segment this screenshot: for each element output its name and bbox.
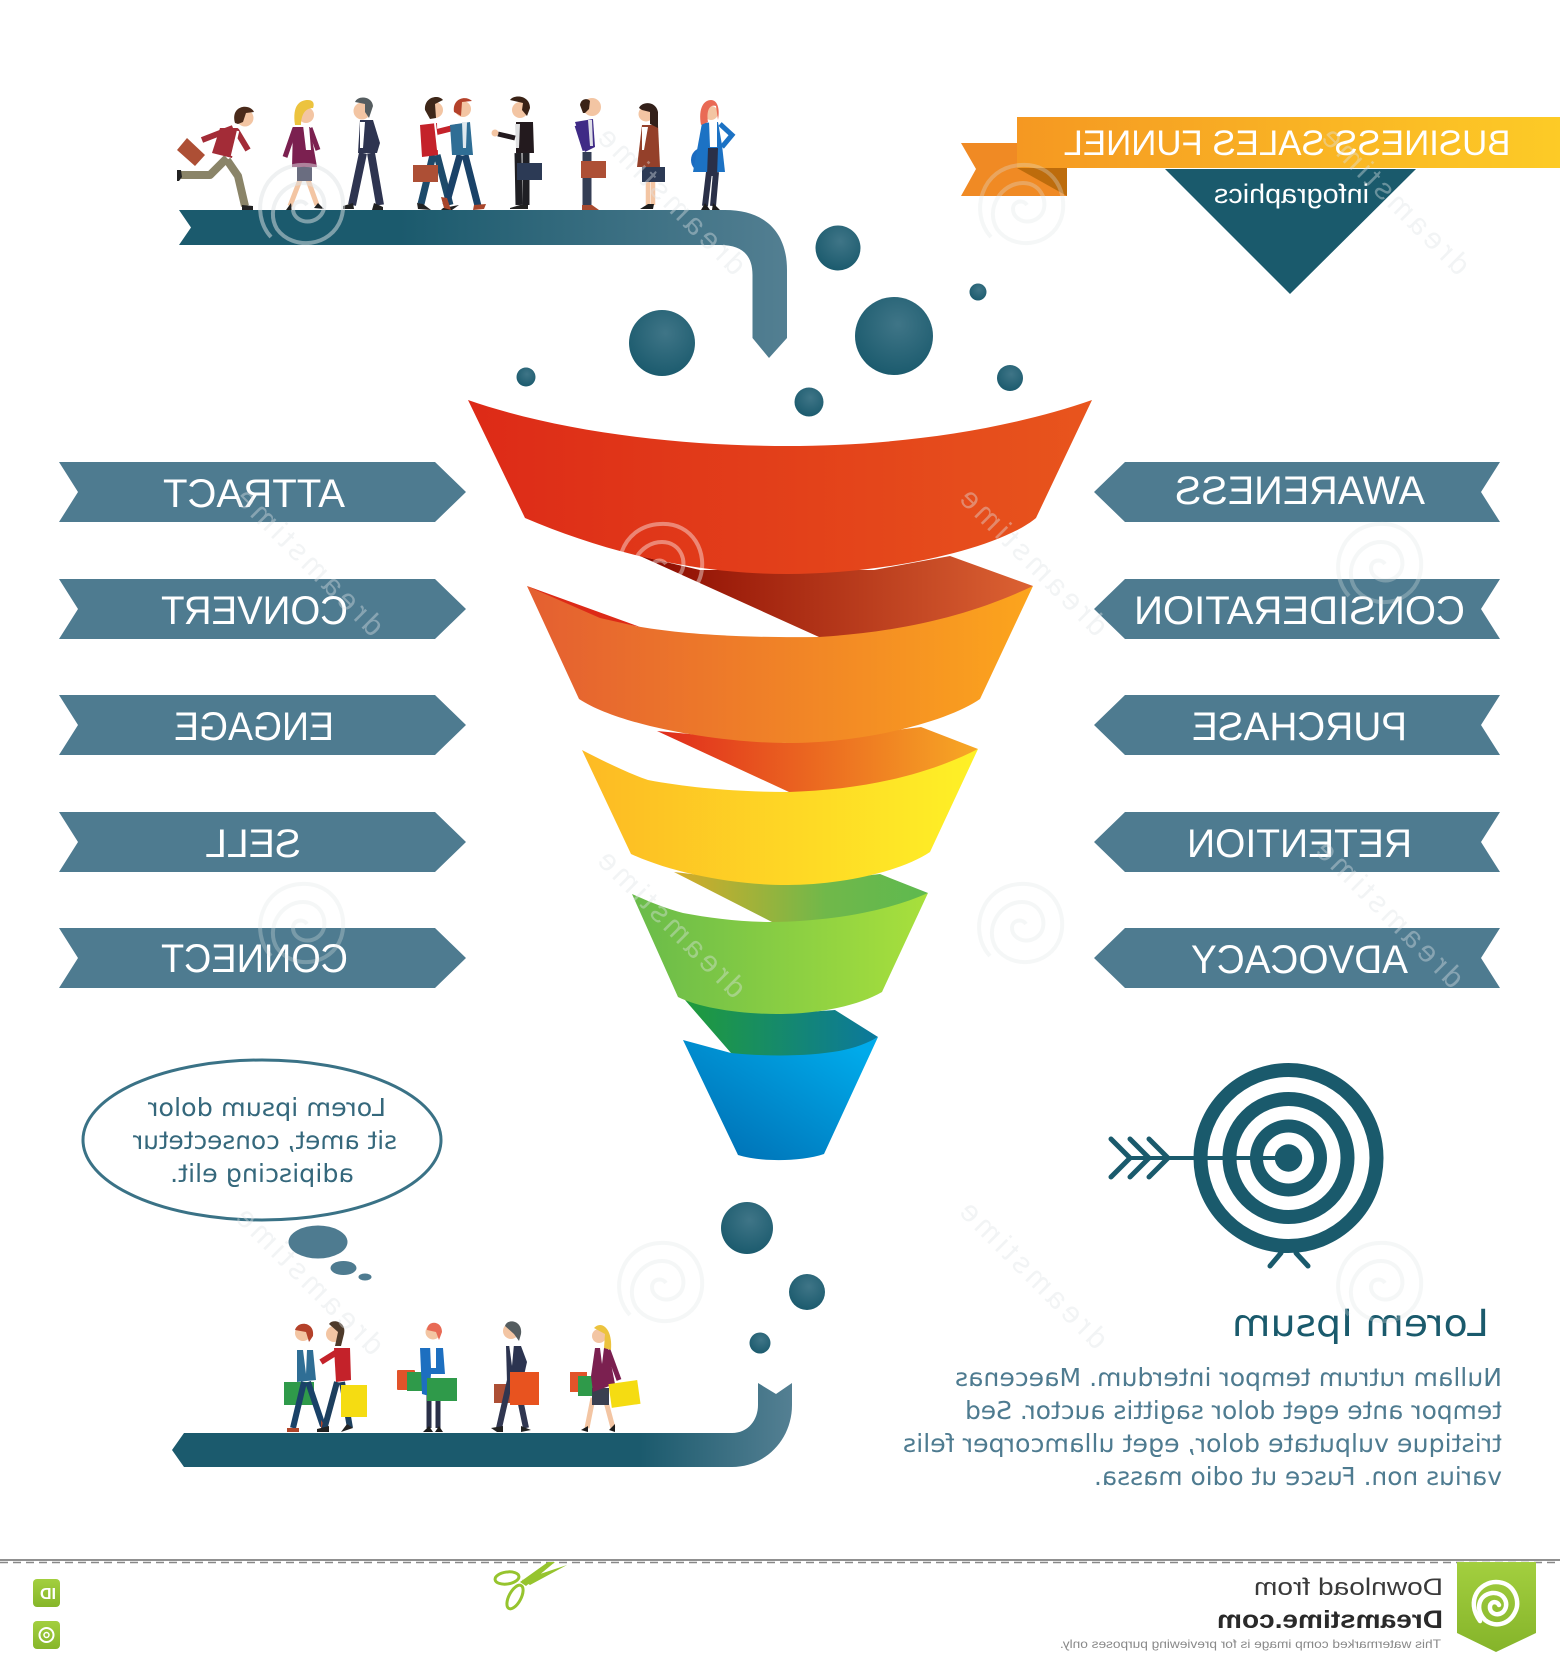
- copyright tag: [33, 1621, 60, 1649]
- person: woman in brown coat with briefcase: [637, 103, 665, 209]
- bubble text: adipiscing elit.: [170, 1159, 354, 1188]
- watermark text: dreamstime: [229, 482, 390, 643]
- bubble text: [132, 1093, 397, 1188]
- ID tag: ID: [40, 1586, 56, 1603]
- footer: [0, 1560, 1560, 1652]
- label: CONVERT: CONVERT: [161, 589, 348, 633]
- watermark text: dreamstime: [953, 1195, 1114, 1356]
- person: bald man in purple jacket with briefcase: [575, 98, 606, 210]
- top conveyor arrow: [179, 210, 787, 358]
- funnel inner band 1: [640, 556, 1033, 650]
- funnel segment 5: blue: [683, 1037, 878, 1160]
- customer: blonde woman with bags: [570, 1325, 641, 1432]
- target middle ring: [1230, 1099, 1348, 1217]
- ID tag: [33, 1579, 60, 1607]
- body paragraph: Nullam rutrum tempor interdum. Maecenas: [955, 1363, 1502, 1392]
- body paragraph: tempor ante eget dolor sagittis auctor. Sed: [965, 1396, 1502, 1425]
- subtitle text: infographics: [1214, 179, 1369, 209]
- watermark text: dreamstime: [229, 1201, 390, 1362]
- label: RETENTION: RETENTION: [1187, 822, 1412, 866]
- label: CONNECT: CONNECT: [161, 937, 348, 981]
- ribbon title text: BUSINESS SALES FUNNEL: [1064, 124, 1510, 163]
- people queue walking on top conveyor: [177, 96, 732, 210]
- funnel inner band 4: [685, 1000, 878, 1062]
- person: man in blue jacket: [441, 98, 486, 210]
- label: ADVOCACY: [1094, 928, 1500, 988]
- ribbon tail: [961, 143, 1067, 196]
- person: running man with briefcase: [177, 107, 254, 210]
- heading: Lorem Ipsum: Lorem Ipsum: [1232, 1302, 1489, 1345]
- funnel inner band 2: [657, 727, 978, 802]
- green badge logo: [1457, 1562, 1536, 1652]
- label: CONNECT: [59, 928, 466, 988]
- funnel segment 4: green: [632, 893, 928, 1014]
- ribbon fold: [1017, 168, 1067, 196]
- label: AWARENESS: AWARENESS: [1175, 469, 1425, 513]
- label: ENGAGE: ENGAGE: [174, 705, 334, 749]
- label: SELL: SELL: [205, 822, 301, 866]
- target inner ring: [1256, 1126, 1320, 1190]
- watermark text: dreamstime: [591, 844, 752, 1005]
- watermark text: dreamstime: [953, 482, 1114, 643]
- bubble trail: [288, 1226, 372, 1280]
- label: ADVOCACY: ADVOCACY: [1191, 938, 1408, 982]
- watermark text: [229, 121, 1476, 1362]
- title ribbon: [961, 117, 1560, 294]
- target outer ring: [1200, 1070, 1376, 1246]
- label: RETENTION: [1094, 812, 1500, 872]
- label: AWARENESS: [1094, 462, 1500, 522]
- label: ENGAGE: [59, 695, 466, 755]
- sales funnel: [468, 400, 1092, 1160]
- customers with shopping bags: [284, 1321, 641, 1432]
- label: PURCHASE: [1094, 695, 1500, 755]
- dreamstime text: Dreamstime.com: [1217, 1606, 1443, 1634]
- ribbon band: [1017, 117, 1560, 168]
- right stage labels: [1094, 462, 1500, 988]
- label: CONSIDERATION: [1094, 579, 1500, 639]
- body paragraph: tristique vulputate dolor, eget ullamcorper felis: [903, 1429, 1502, 1458]
- customer: man in navy suit with bags: [491, 1321, 539, 1432]
- funnel inner band 3: [674, 872, 928, 932]
- footer cut line: [0, 1559, 1560, 1561]
- target stand: [1270, 1253, 1308, 1266]
- arrow shaft: [1130, 1156, 1285, 1160]
- subtitle triangle: [1165, 169, 1416, 294]
- target bullseye: [1275, 1144, 1302, 1172]
- watermark text: dreamstime: [591, 121, 752, 282]
- person: red-haired woman in blue coat with blue bag: [691, 100, 732, 210]
- watermark spirals: [260, 165, 1421, 1321]
- disclaimer text: This watermarked comp image is for previewing purposes only.: [1060, 1637, 1441, 1651]
- thought bubble: [83, 1060, 441, 1280]
- bubble text: Lorem ipsum dolor: [147, 1093, 386, 1122]
- label: ATTRACT: [59, 462, 466, 522]
- person: man in navy suit: [343, 97, 383, 210]
- falling balls above funnel: [516, 226, 1023, 416]
- left stage labels: [59, 462, 466, 988]
- label: CONSIDERATION: CONSIDERATION: [1134, 589, 1465, 633]
- person: bearded man in red jacket with briefcase: [413, 97, 459, 210]
- label: ATTRACT: ATTRACT: [163, 472, 345, 516]
- funnel segment 2: orange: [527, 586, 1033, 743]
- funnel segment 1: red: [468, 400, 1092, 574]
- watermark text: dreamstime: [1315, 121, 1476, 282]
- arrow fletching: [1111, 1139, 1168, 1177]
- customer: bearded man in red jacket with yellow bag: [317, 1321, 367, 1432]
- body paragraph: [903, 1363, 1502, 1491]
- download text: Download from: [1254, 1574, 1443, 1601]
- bubble outline: [83, 1060, 441, 1220]
- label: SELL: [59, 812, 466, 872]
- sliver of red on orange edge: [527, 586, 640, 627]
- balls leaving funnel: [721, 1202, 825, 1354]
- target with arrow icon: [1111, 1070, 1376, 1266]
- customer: red-haired woman in blue coat with bags: [397, 1323, 457, 1432]
- person: blonde woman: [285, 100, 324, 210]
- customer: man in blue jacket with green bag: [284, 1324, 327, 1432]
- label: CONVERT: [59, 579, 466, 639]
- bubble text: sit amet, consectetur: [132, 1126, 397, 1155]
- label: PURCHASE: PURCHASE: [1192, 705, 1407, 749]
- scissors icon: [494, 1562, 567, 1611]
- funnel segment 3: yellow: [582, 749, 978, 885]
- bottom conveyor arrow: [172, 1383, 792, 1467]
- body paragraph: varius non. Fusce ut odio massa.: [1094, 1462, 1502, 1491]
- person: man in black suit with briefcase: [492, 96, 542, 209]
- watermark text: dreamstime: [1309, 834, 1470, 995]
